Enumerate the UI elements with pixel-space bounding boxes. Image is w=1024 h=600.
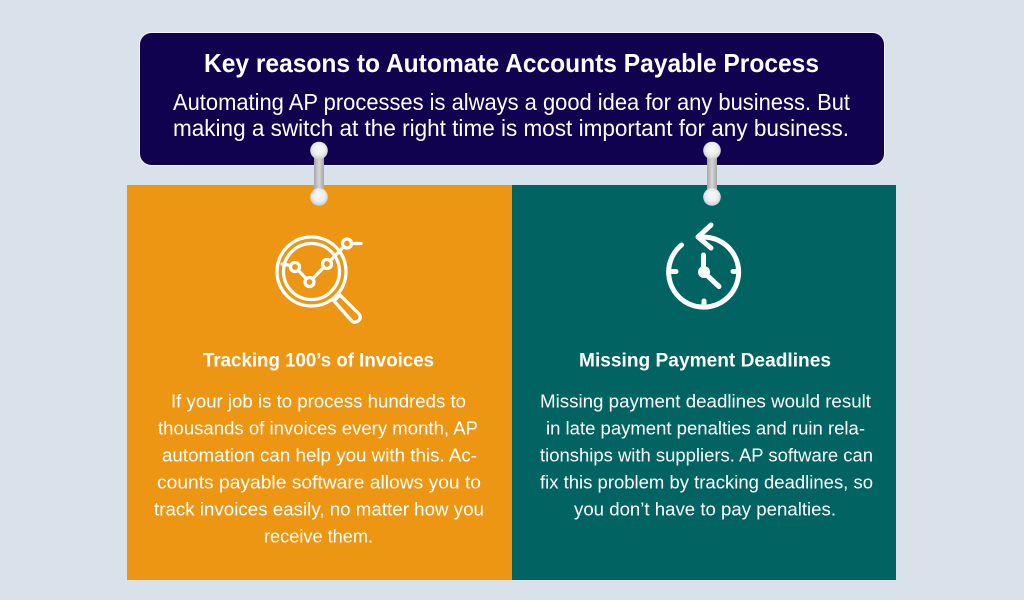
title: Key reasons to Automate Accounts Payable Process [204,48,819,78]
panel: header [140,32,884,166]
body text: tracking: automation can help you with this. Ac- [162,446,477,466]
body text: tracking: receive them. [264,526,373,546]
body text: tracking [154,392,484,546]
body text: tracking: If your job is to process hundreds to [171,392,466,412]
connector: left [310,142,328,206]
body text: deadlines: tionships with suppliers. AP software can [540,446,873,466]
icon: clock with back arrow [669,225,739,307]
icon: magnifier with chart [277,237,361,322]
body text: tracking: thousands of invoices every month, AP [158,418,478,438]
body text: deadlines: Missing payment deadlines would result [540,392,871,412]
connector: right [703,142,721,206]
body text: deadlines: you don’t have to pay penalties. [574,500,836,520]
body text: tracking: counts payable software allows you to [157,472,481,492]
body text: deadlines: in late payment penalties and ruin rela- [546,418,865,438]
intro text [173,89,851,141]
body text: deadlines: fix this problem by tracking deadlines, so [540,472,873,492]
intro text: Automating AP processes is always a good idea for any business. But [173,89,851,115]
heading: deadlines: Missing Payment Deadlines [579,350,831,372]
heading: tracking: Tracking 100’s of Invoices [203,350,434,372]
body text: deadlines [540,392,873,520]
intro text: making a switch at the right time is most important for any business. [173,115,849,141]
panel: payment deadlines [512,185,896,580]
panel: tracking invoices [127,185,512,580]
body text: tracking: track invoices easily, no matter how you [154,500,484,520]
